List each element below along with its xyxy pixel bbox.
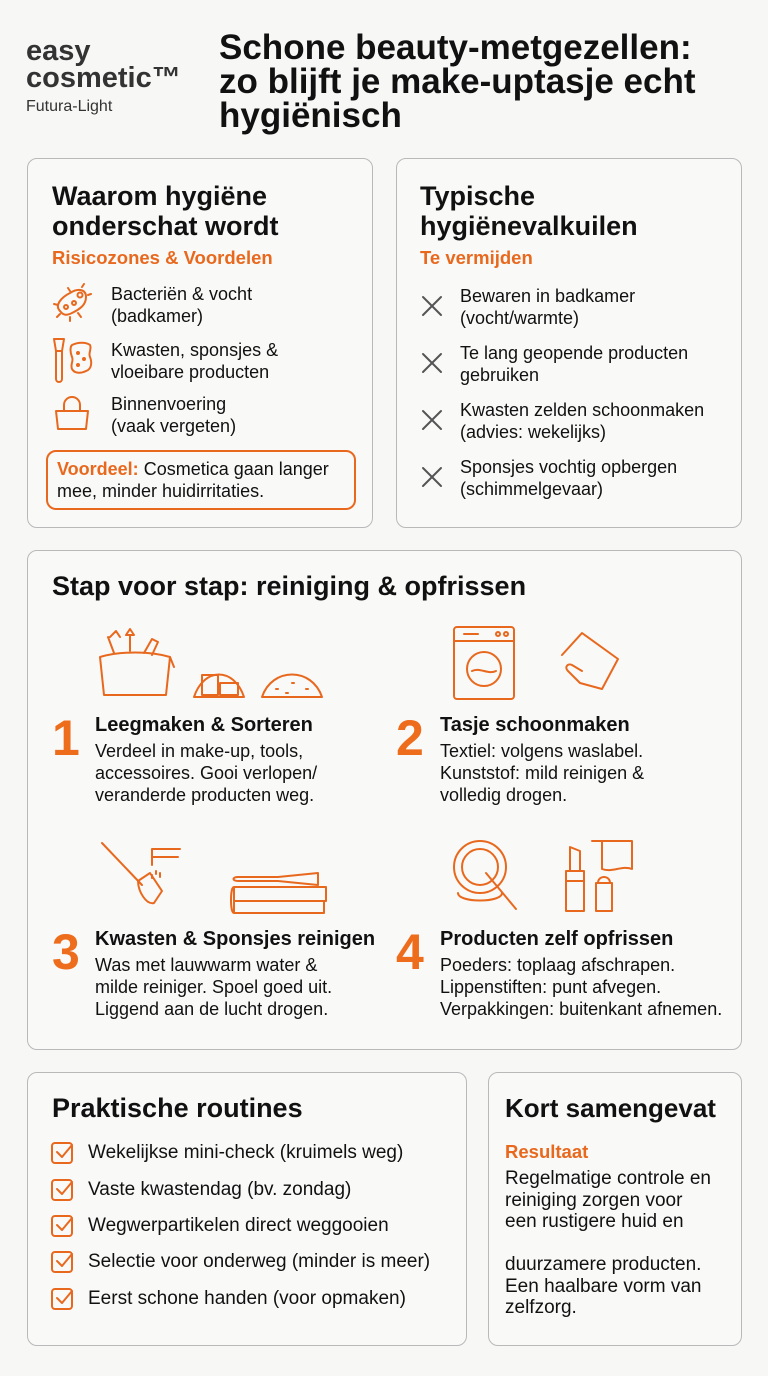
heading — [420, 181, 638, 241]
item 5: Eerst schone handen (voor opmaken) — [88, 1288, 406, 1309]
callout: benefit: Voordeel: Cosmetica gaan langer mee, minder huidirritaties. — [57, 459, 329, 501]
step 1 text: accessoires. Gooi verlopen/ — [95, 763, 317, 783]
heading: Praktische routines — [52, 1093, 303, 1123]
panel: pitfalls — [396, 158, 742, 528]
icon: bag — [55, 396, 89, 430]
step 3 text: milde reiniger. Spoel goed uit. — [95, 977, 332, 997]
step 1 text: Verdeel in make-up, tools, — [95, 741, 303, 761]
text: pitfall 2: Te lang geopende producten — [460, 343, 688, 363]
title — [219, 28, 696, 135]
icon: bacteria — [53, 283, 92, 322]
logo: Futura-Light — [26, 98, 112, 115]
step 3 text: Liggend aan de lucht drogen. — [95, 999, 328, 1019]
text: pitfall 3: (advies: wekelijks) — [460, 422, 606, 442]
subheading: Te vermijden — [420, 247, 533, 268]
step 2 text: Kunststof: mild reinigen & — [440, 763, 644, 783]
text: pitfall 1: (vocht/warmte) — [460, 308, 579, 328]
summary text: zelfzorg. — [505, 1297, 577, 1318]
icon: x — [422, 296, 442, 316]
step 4 text — [440, 955, 722, 1019]
icon: x — [422, 353, 442, 373]
panel: why hygiene — [27, 158, 373, 528]
step 2 text: Textiel: volgens waslabel. — [440, 741, 643, 761]
text: pitfall 1 — [460, 286, 635, 328]
heading: onderschat wordt — [52, 211, 279, 241]
heading: Waarom hygiëne — [52, 181, 267, 211]
heading: Stap voor stap: reiniging & opfrissen — [52, 571, 526, 601]
step 3 text: Was met lauwwarm water & — [95, 955, 317, 975]
summary text: een rustigere huid en — [505, 1211, 684, 1232]
summary text: reiniging zorgen voor — [505, 1190, 682, 1210]
icon: washing machine and cloth — [453, 626, 619, 700]
step 4 text: Poeders: toplaag afschrapen. — [440, 955, 675, 975]
icon: brush under tap and towels — [101, 842, 327, 914]
text: brushes — [111, 340, 278, 382]
summary text: Een haalbare vorm van — [505, 1276, 701, 1296]
text: pitfall 3: Kwasten zelden schoonmaken — [460, 400, 704, 420]
text: brushes: Kwasten, sponsjes & — [111, 340, 278, 360]
text: bacteria — [111, 284, 252, 326]
panel: routines — [27, 1072, 467, 1346]
step 4 text: Lippenstiften: punt afvegen. — [440, 977, 661, 997]
summary text: duurzamere producten. — [505, 1254, 701, 1275]
text: pitfall 2 — [460, 343, 688, 385]
logo: cosmetic™ — [26, 62, 181, 94]
item 4: Selectie voor onderweg (minder is meer) — [88, 1251, 430, 1272]
step 4 title: Producten zelf opfrissen — [440, 928, 673, 950]
heading: Typische — [420, 181, 535, 211]
step 2 number: 2 — [396, 710, 424, 766]
text: lining: (vaak vergeten) — [111, 416, 236, 436]
panel: summary — [488, 1072, 742, 1346]
step 3 text — [95, 955, 332, 1019]
title: zo blijft je make-uptasje echt — [219, 62, 696, 101]
step 4 number: 4 — [396, 924, 424, 980]
logo — [26, 35, 181, 115]
logo: easy — [26, 35, 91, 67]
heading: hygiënevalkuilen — [420, 211, 638, 241]
step 4 text: Verpakkingen: buitenkant afnemen. — [440, 999, 722, 1019]
summary text — [505, 1168, 711, 1318]
icon: x — [422, 467, 442, 487]
icon: compact, lipstick, cloth — [453, 840, 633, 912]
icon: x — [422, 410, 442, 430]
checklist — [51, 1142, 430, 1310]
item 1: Wekelijkse mini-check (kruimels weg) — [88, 1142, 403, 1163]
step 3 number: 3 — [52, 924, 80, 980]
text: pitfall 3 — [460, 400, 704, 442]
title: Schone beauty-metgezellen: — [219, 28, 692, 67]
step 1 text: veranderde producten weg. — [95, 785, 314, 805]
subheading: Resultaat — [505, 1141, 588, 1162]
text: bacteria: Bacteriën & vocht — [111, 284, 252, 304]
item 2: Vaste kwastendag (bv. zondag) — [88, 1179, 351, 1200]
text: pitfall 4 — [460, 457, 677, 499]
step 2 text — [440, 741, 644, 805]
text: lining — [111, 394, 236, 436]
step 1 text — [95, 741, 318, 805]
subheading: Risicozones & Voordelen — [52, 247, 273, 268]
step 2 title: Tasje schoonmaken — [440, 714, 630, 736]
text: bacteria: (badkamer) — [111, 306, 203, 326]
step 3 title: Kwasten & Sponsjes reinigen — [95, 928, 375, 950]
step 1 title: Leegmaken & Sorteren — [95, 714, 313, 736]
panel: step by step — [27, 550, 742, 1050]
icon: bag with tools — [99, 628, 323, 698]
text: pitfall 4: Sponsjes vochtig opbergen — [460, 457, 677, 477]
heading — [52, 181, 279, 241]
step 1 number: 1 — [52, 710, 80, 766]
summary text: Regelmatige controle en — [505, 1168, 711, 1189]
text: lining: Binnenvoering — [111, 394, 226, 414]
step 2 text: volledig drogen. — [440, 785, 567, 805]
text: brushes: vloeibare producten — [111, 362, 269, 382]
text: pitfall 4: (schimmelgevaar) — [460, 479, 603, 499]
item 3: Wegwerpartikelen direct weggooien — [88, 1215, 389, 1236]
heading: Kort samengevat — [505, 1093, 716, 1123]
title: hygiënisch — [219, 96, 402, 135]
callout: benefit — [46, 450, 356, 510]
icon: brush and sponge — [53, 338, 92, 383]
text: pitfall 2: gebruiken — [460, 365, 539, 385]
text: pitfall 1: Bewaren in badkamer — [460, 286, 635, 306]
